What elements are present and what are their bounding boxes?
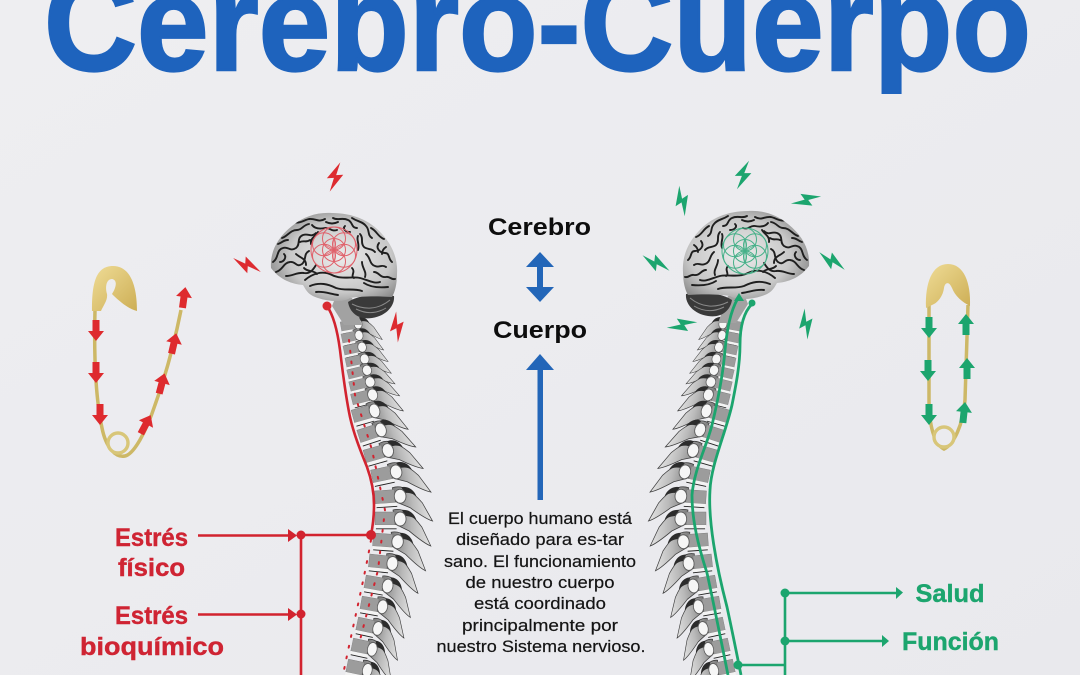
label: Estrés bioquímico: bioquímico — [80, 633, 224, 661]
body text — [436, 509, 646, 656]
icon: lightning bolts, green — [639, 159, 849, 341]
connector: stress inputs — [198, 529, 376, 675]
heading: Cuerpo: Cuerpo — [493, 317, 587, 344]
label: Salud: Salud — [916, 580, 984, 608]
label: Estrés bioquímico: Estrés — [115, 602, 188, 630]
icon: flower of life, green — [722, 228, 768, 274]
body text: nuestro Sistema nervioso. — [436, 637, 646, 656]
illustration: spine, healthy — [648, 313, 741, 675]
body text: está coordinado — [474, 594, 606, 613]
safety pin, open, with red arrows — [88, 266, 193, 456]
label: Estrés físico: físico — [118, 554, 185, 582]
body text: de nuestro cuerpo — [466, 573, 614, 592]
body text: principalmente por — [462, 616, 618, 635]
body text: El cuerpo humano está — [448, 509, 633, 528]
heading: Cerebro: Cerebro — [488, 214, 591, 241]
nerve lines, green — [692, 298, 752, 675]
body text: diseñado para es-tar — [456, 530, 624, 549]
nerve signal dots, red — [343, 340, 385, 675]
illustration: brain, healthy — [683, 211, 809, 323]
panel: stressed side (red) — [80, 161, 433, 675]
panel: healthy side (green) — [639, 159, 999, 675]
arrow: two-way — [526, 252, 554, 302]
body text: sano. El funcionamiento — [444, 552, 636, 571]
label: Estrés físico — [115, 524, 188, 582]
connector: health outputs — [734, 587, 903, 675]
nerve line, red — [327, 306, 374, 535]
icon: flower of life, red — [311, 227, 357, 273]
safety pin, closed, with green arrows — [920, 264, 975, 449]
label: Función: Función — [902, 628, 999, 656]
icon: lightning bolts, red — [231, 161, 409, 344]
label: Estrés bioquímico — [80, 602, 224, 661]
label: Estrés físico: Estrés — [115, 524, 188, 552]
illustration: spine, stressed — [340, 313, 433, 675]
panel: centre column — [436, 214, 646, 656]
illustration: brain, stressed — [271, 213, 397, 325]
arrow: upward — [526, 354, 554, 500]
